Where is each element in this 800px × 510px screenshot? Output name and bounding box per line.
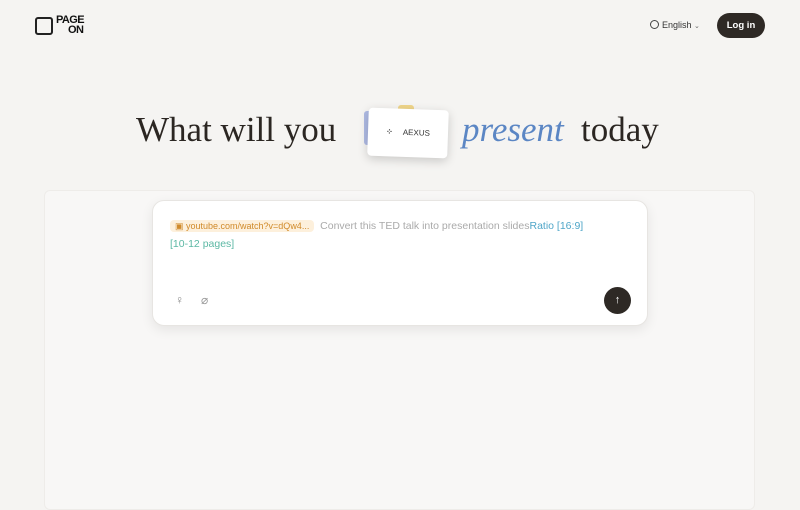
input box <box>152 200 648 326</box>
login button <box>717 13 765 38</box>
logo: PAGE <box>56 14 84 26</box>
language selector: English ⌄ <box>662 20 700 30</box>
send button: ↑ <box>615 294 620 306</box>
logo <box>35 14 84 36</box>
send button <box>604 287 631 314</box>
card icon: AEXUS <box>364 105 452 165</box>
title: present <box>462 110 564 149</box>
background panel <box>44 190 755 510</box>
prompt text <box>170 220 583 250</box>
card icon: AEXUS: ⁘ AEXUS <box>386 127 430 138</box>
title: today <box>581 110 659 149</box>
title: What will you <box>136 110 336 149</box>
logo: ON <box>68 24 83 36</box>
login button: Log in <box>727 20 755 31</box>
icon: bulb: ♀ <box>175 293 184 307</box>
icon: paperclip: ⌀ <box>201 293 208 307</box>
prompt text: ▣ youtube.com/watch?v=dQw4... Convert this TED talk into presentation slidesRatio [16:9] <box>175 220 583 232</box>
title <box>136 110 659 149</box>
prompt text: [10-12 pages] <box>170 238 234 250</box>
